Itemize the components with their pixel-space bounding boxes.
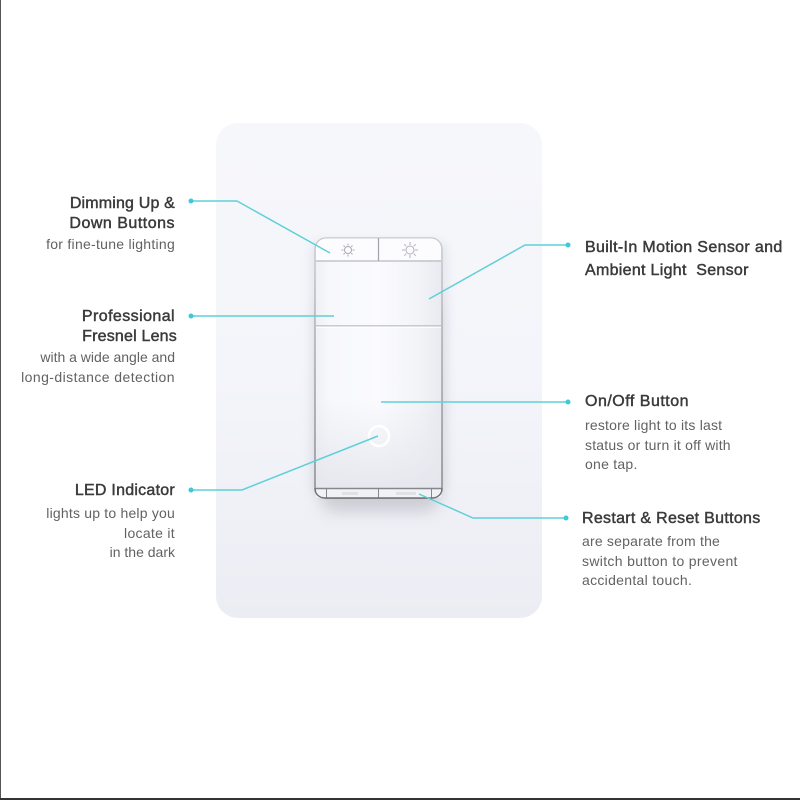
text: motion sensor: Built-In Motion Sensor and [585, 239, 783, 256]
text: restart and reset [582, 510, 761, 588]
leader dot: fresnel lens [188, 314, 194, 318]
text: LED indicator: locate it [124, 524, 175, 540]
text: motion sensor: Ambient Light Sensor [585, 262, 749, 279]
leader dot: motion sensor [566, 242, 570, 248]
text: on/off button: On/Off Button [585, 393, 689, 410]
fresnel lens divider [316, 326, 441, 327]
text: fresnel lens: long-distance detection [21, 368, 175, 384]
text: fresnel lens [21, 308, 177, 385]
text: on/off button: restore light to its last [585, 417, 722, 433]
text: LED indicator: in the dark [110, 544, 175, 560]
leader: on/off button [381, 401, 568, 403]
text: LED indicator: LED Indicator [75, 482, 175, 499]
text: on/off button: status or turn it off with [585, 436, 731, 452]
text: motion sensor [584, 239, 783, 279]
text: fresnel lens: Fresnel Lens [82, 328, 177, 345]
text: dimming buttons: Dimming Up & [70, 195, 175, 212]
icon: LED ring [369, 426, 389, 446]
text: restart and reset: accidental touch. [582, 572, 692, 588]
text: restart and reset: are separate from the [582, 533, 720, 549]
icon: dim down sun [342, 244, 354, 256]
text: dimming buttons: for fine-tune lighting [46, 236, 175, 252]
leader: restart and reset [419, 494, 566, 518]
leader dot: on/off button [566, 400, 570, 404]
leader dot: LED indicator [188, 488, 194, 492]
text: restart and reset: switch button to prevent [582, 552, 738, 568]
leader: LED indicator [191, 436, 378, 490]
lower face shading [316, 400, 441, 488]
leader: motion sensor [429, 245, 568, 299]
text: restart and reset: Restart & Reset Buttons [582, 510, 761, 527]
restart and reset buttons [315, 488, 442, 498]
text: dimming buttons [46, 195, 175, 252]
text: LED indicator [46, 482, 175, 560]
text: fresnel lens: with a wide angle and [40, 349, 175, 365]
leader dot: dimming buttons [188, 198, 194, 204]
panel: wall plate [216, 123, 542, 618]
text: dimming buttons: Down Buttons [69, 215, 175, 232]
leader: fresnel lens [191, 315, 334, 317]
leader: dimming buttons [191, 201, 330, 253]
dimming buttons [316, 238, 441, 261]
text: fresnel lens: Professional [82, 308, 175, 325]
leader dot: restart and reset [564, 516, 568, 520]
switch body [311, 238, 447, 512]
text: on/off button [585, 393, 731, 472]
text: LED indicator: lights up to help you [46, 505, 175, 521]
icon: dim up sun [402, 242, 418, 258]
switch outline and face [315, 238, 442, 498]
text: on/off button: one tap. [585, 456, 638, 472]
